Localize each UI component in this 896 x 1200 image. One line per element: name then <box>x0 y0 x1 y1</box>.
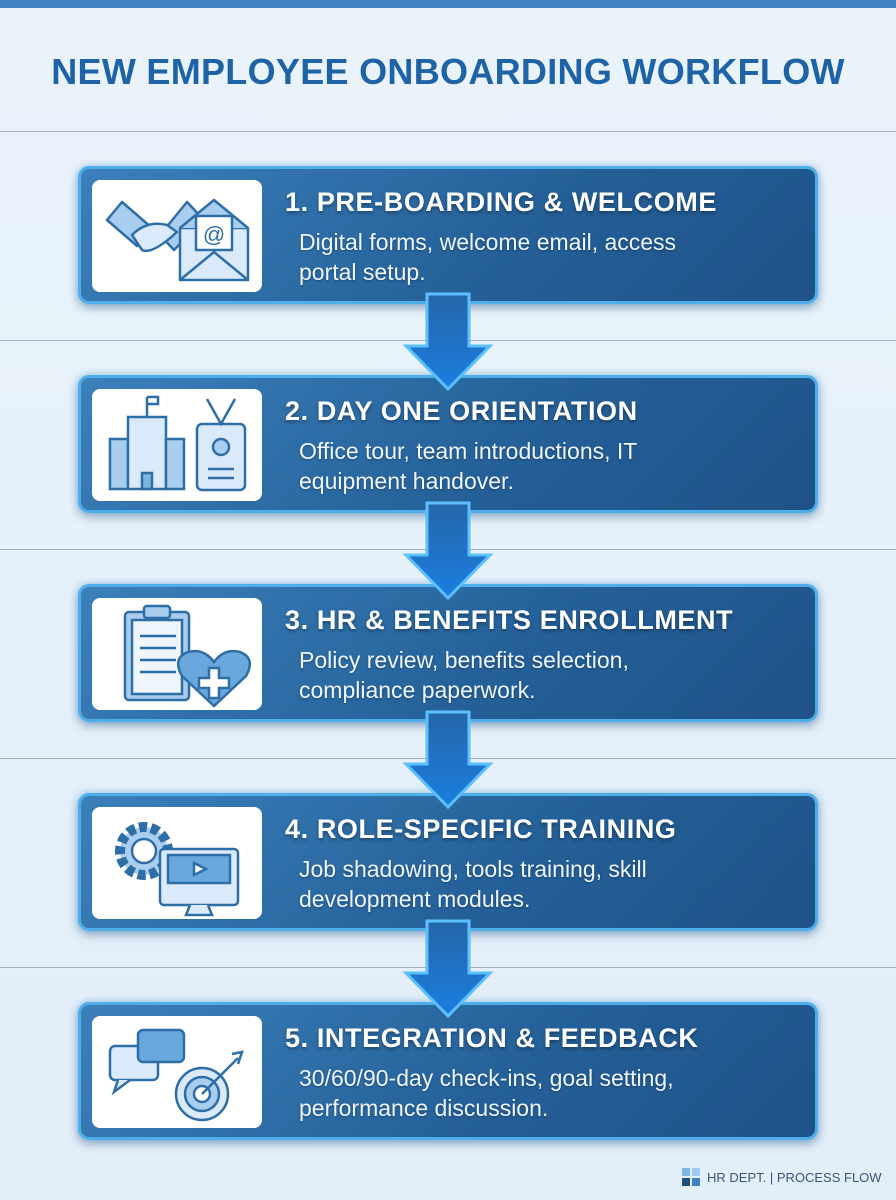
text: Digital forms, welcome email, access portal setup. <box>299 229 676 285</box>
icon: handshake and envelope <box>92 180 262 292</box>
heading: 5. INTEGRATION & FEEDBACK <box>285 1023 699 1053</box>
icon: handshake and envelope: @ <box>203 222 225 247</box>
heading: 2. DAY ONE ORIENTATION <box>285 396 638 426</box>
title: NEW EMPLOYEE ONBOARDING WORKFLOW <box>51 51 845 92</box>
heading: 4. ROLE-SPECIFIC TRAINING <box>285 814 677 844</box>
icon: chat bubbles and target <box>92 1016 262 1128</box>
panel: step 4 <box>78 793 818 931</box>
text: Policy review, benefits selection, compliance paperwork. <box>299 647 629 703</box>
panel: step 2 <box>78 375 818 513</box>
arrow 2 to 3 <box>402 502 494 600</box>
heading: 1. PRE-BOARDING & WELCOME <box>285 187 717 217</box>
text: Office tour, team introductions, IT equipment handover. <box>299 438 637 494</box>
heading: 3. HR & BENEFITS ENROLLMENT <box>285 605 733 635</box>
text: 30/60/90-day check-ins, goal setting, performance discussion. <box>299 1065 674 1121</box>
footer: HR DEPT. | PROCESS FLOW <box>707 1170 882 1184</box>
panel: step 1 <box>78 166 818 304</box>
arrow 1 to 2 <box>402 292 494 391</box>
panel: step 3 <box>78 584 818 722</box>
panel: step 5 <box>78 1002 818 1140</box>
icon: building and badge <box>92 389 262 501</box>
icon: logo <box>682 1168 700 1186</box>
text: Job shadowing, tools training, skill development modules. <box>299 856 647 912</box>
arrow 4 to 5 <box>402 920 494 1018</box>
icon: gear and monitor <box>92 807 262 919</box>
arrow 3 to 4 <box>402 710 494 809</box>
icon: clipboard and heart <box>92 598 262 710</box>
